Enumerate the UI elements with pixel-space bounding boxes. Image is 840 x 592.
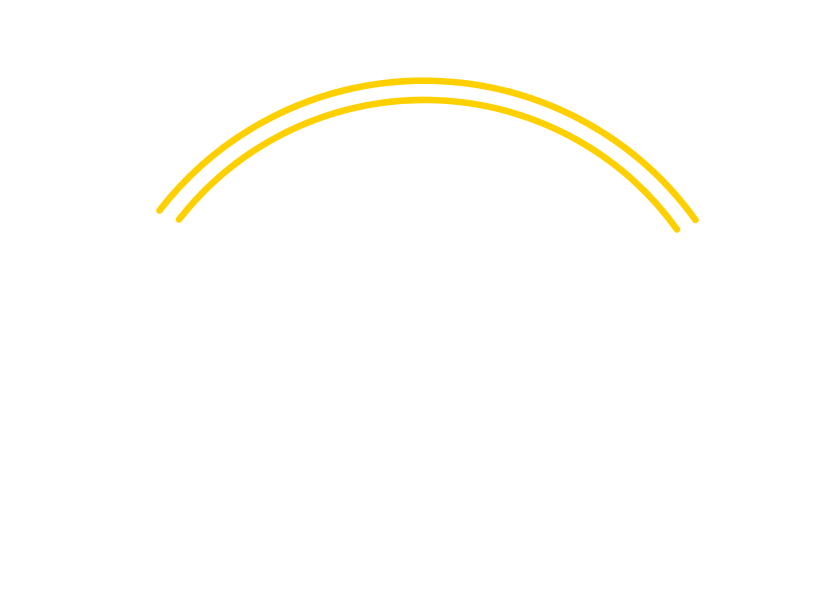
double yellow arc (160, 81, 696, 229)
inner arc (179, 100, 677, 229)
outer arc (160, 81, 696, 220)
